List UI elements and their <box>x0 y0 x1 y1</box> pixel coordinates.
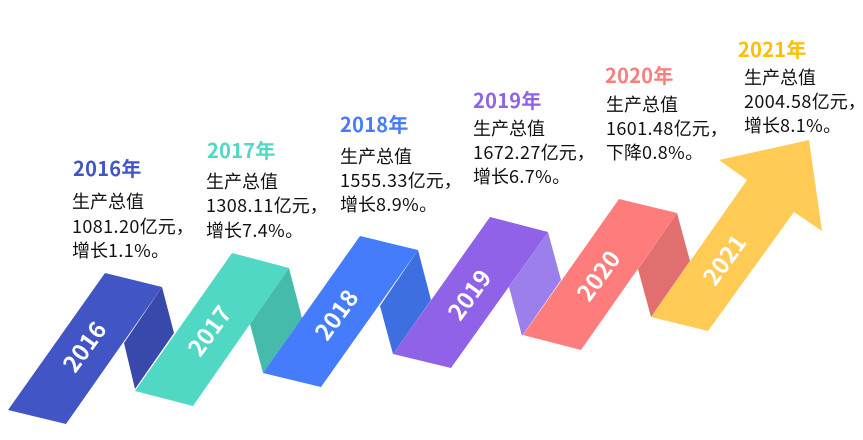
band label: 2017: 2017 <box>178 297 238 362</box>
text block: 2020: 生产总值 <box>606 91 678 117</box>
arrow: 2021 <box>651 140 822 331</box>
band label: 2018: 2018 <box>305 281 365 346</box>
band: 2018 <box>263 236 418 387</box>
band: 2020 <box>523 199 677 350</box>
text block: 2016: 增长1.1%。 <box>72 237 169 263</box>
text block: 2019: 生产总值 <box>473 115 545 141</box>
fold: 2019 <box>509 232 561 336</box>
heading: 2018年: 2018年 <box>340 109 409 138</box>
text block: 2019: 1672.27亿元， <box>473 139 595 165</box>
text block: 2021: 增长8.1%。 <box>744 112 841 138</box>
band label: 2021: 2021 <box>693 226 753 291</box>
band: 2016 <box>8 273 162 424</box>
heading: 2020年: 2020年 <box>605 60 674 89</box>
text block: 2016: 生产总值 <box>72 188 144 214</box>
heading: 2016年: 2016年 <box>73 153 142 182</box>
text block: 2020: 下降0.8%。 <box>606 139 703 165</box>
text block: 2021: 2004.58亿元， <box>744 88 863 114</box>
text block: 2020: 1601.48亿元， <box>606 115 728 141</box>
fold: 2017 <box>250 268 302 373</box>
text block: 2017: 增长7.4%。 <box>206 217 303 243</box>
text block: 2021: 生产总值 <box>744 64 816 90</box>
text block: 2016: 1081.20亿元， <box>72 213 194 239</box>
text block: 2018: 增长8.9%。 <box>340 191 437 217</box>
heading: 2017年: 2017年 <box>207 135 276 164</box>
band: 2017 <box>135 253 289 406</box>
band label: 2016: 2016 <box>53 313 113 378</box>
band label: 2019: 2019 <box>438 261 498 326</box>
heading: 2019年: 2019年 <box>473 85 542 114</box>
heading: 2021年: 2021年 <box>738 34 807 63</box>
fold: 2016 <box>124 287 174 389</box>
text block: 2017: 生产总值 <box>206 168 278 194</box>
fold: 2018 <box>380 250 431 354</box>
text block: 2018: 生产总值 <box>340 143 412 169</box>
band label: 2020: 2020 <box>567 242 627 307</box>
band: 2019 <box>393 217 548 368</box>
fold: 2020 <box>638 213 690 317</box>
text block: 2019: 增长6.7%。 <box>473 163 570 189</box>
text block: 2017: 1308.11亿元， <box>206 192 328 218</box>
text block: 2018: 1555.33亿元， <box>340 167 462 193</box>
